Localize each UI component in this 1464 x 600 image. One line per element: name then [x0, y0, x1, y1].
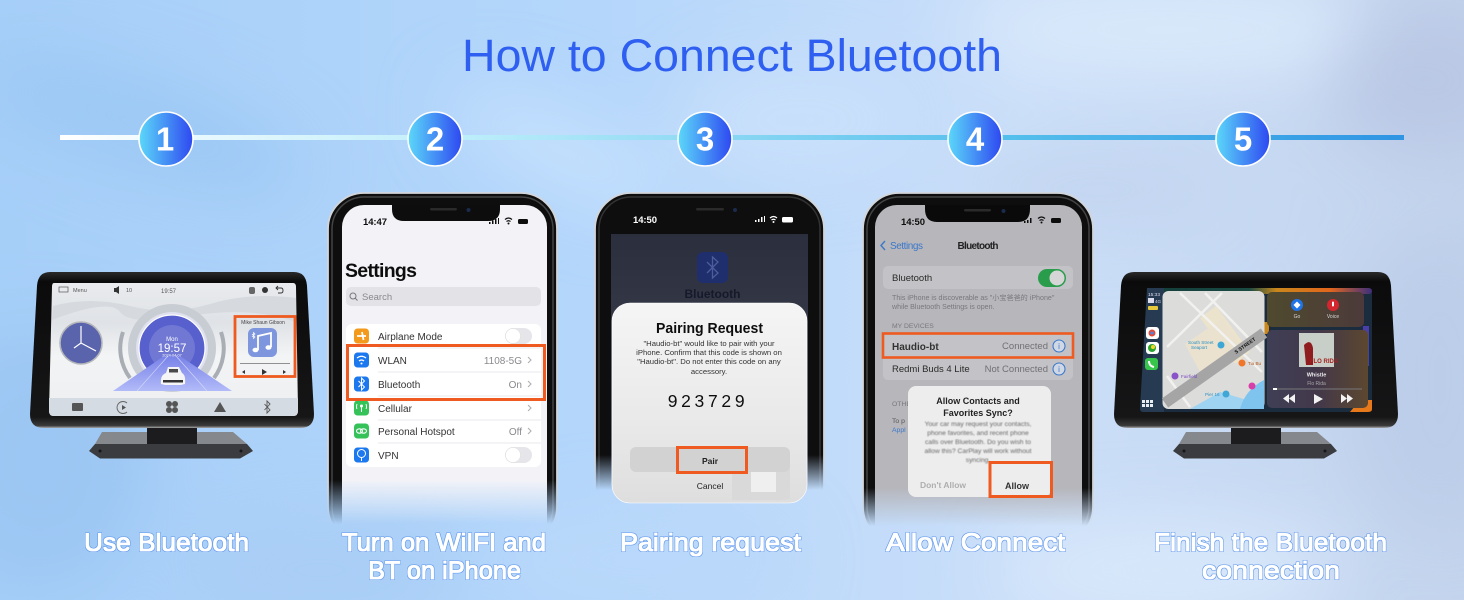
caption 1: Use Bluetooth [84, 529, 249, 557]
bluetooth settings content: while Bluetooth Settings is open. [891, 303, 995, 311]
allow sync dialog: Favorites Sync? [943, 408, 1013, 418]
device rows: Not Connected [985, 364, 1048, 375]
device rows: i [1058, 365, 1060, 374]
phone body [863, 193, 1093, 545]
settings list [346, 324, 541, 467]
bluetooth toggle row [883, 266, 1073, 289]
row: airplane mode [354, 328, 532, 344]
pairing dialog: Pairing Request [656, 321, 763, 337]
bluetooth settings content [881, 217, 1073, 434]
speedometer: Mon [166, 337, 178, 343]
timeline [60, 112, 1404, 166]
settings screen: 14:47 [363, 217, 387, 228]
step marker 1 [139, 112, 193, 166]
panel: step 1 car display [30, 272, 314, 458]
status bar [59, 286, 283, 295]
row: WLAN: 1108-5G [484, 356, 522, 367]
now playing panel: Flo Rida [1307, 381, 1326, 387]
panel: step 3 iPhone pairing request [594, 192, 825, 504]
step marker 2 [408, 112, 462, 166]
pairing dialog: iPhone. Confirm that this code is shown on [636, 348, 782, 357]
step marker 3 [678, 112, 732, 166]
map: Tia Bu [1248, 361, 1262, 366]
bluetooth settings content: MY DEVICES [892, 323, 934, 330]
device rows [883, 333, 1073, 380]
status bar: Menu [73, 288, 87, 294]
allow sync dialog: allow this? CarPlay will work without [924, 448, 1032, 455]
row: VPN: VPN [378, 451, 399, 462]
allow sync dialog: phone favorites, and recent phone [927, 430, 1029, 437]
now playing panel [1267, 330, 1368, 408]
display screen [49, 283, 298, 416]
panel: step 2 iPhone settings [328, 193, 557, 545]
caption 2: BT on iPhone [368, 557, 521, 585]
pairing dialog: Pair [702, 456, 719, 466]
bluetooth app icon: Bluetooth [684, 287, 740, 301]
bluetooth settings content: To p [892, 418, 905, 425]
search bar: Search [362, 292, 392, 303]
phone body [594, 192, 825, 489]
caption 3: Pairing request [620, 529, 801, 557]
display stand [89, 428, 253, 458]
row: Bluetooth: On [509, 380, 522, 391]
bluetooth settings content: 14:50 [901, 217, 925, 228]
settings screen [342, 205, 547, 545]
row: personal hotspot [354, 424, 531, 438]
sidebar: 4G [1155, 299, 1161, 304]
row: WLAN [354, 352, 531, 368]
music app: Mike Shaun Gibson [241, 320, 285, 326]
settings screen: Settings [345, 260, 417, 282]
step marker 5: 5 [1234, 120, 1252, 158]
allow sync dialog: Your car may request your contacts, [925, 421, 1032, 428]
caption 2 [342, 529, 546, 585]
step marker 1: 1 [156, 120, 174, 158]
orange highlight: Pair [678, 448, 746, 472]
step marker 3: 3 [696, 120, 714, 158]
pairing dialog: accessory. [691, 367, 727, 376]
search bar [346, 287, 541, 306]
sidebar: 15:33 [1148, 292, 1160, 298]
panel: step 4 iPhone bluetooth settings [863, 193, 1093, 545]
now playing panel: FLO RIDA [1310, 359, 1339, 365]
row: Bluetooth [354, 376, 531, 392]
map: Pier 16 [1205, 392, 1220, 397]
status bar: 10 [126, 288, 132, 294]
row: cellular [354, 400, 531, 416]
pairing dialog: "Haudio-bt". Do not enter this code on any [637, 357, 781, 366]
row: Bluetooth: Bluetooth [378, 380, 420, 391]
device rows: Connected [1002, 341, 1048, 352]
row: airplane mode: Airplane Mode [378, 332, 443, 343]
orange highlight: WLAN and Bluetooth rows [348, 346, 544, 400]
allow sync dialog: syncing. [966, 457, 990, 464]
map: S STREET [1234, 337, 1257, 356]
speedometer: 19:57 [158, 343, 186, 355]
status bar [633, 215, 793, 226]
speedometer: 2024-04-07 [162, 354, 182, 358]
allow sync dialog: Allow Contacts and [936, 396, 1020, 406]
row: VPN [354, 447, 532, 463]
pairing dialog: Cancel [697, 481, 723, 491]
speedometer [113, 304, 232, 392]
title: How to Connect Bluetooth [462, 30, 1002, 81]
row: personal hotspot: Off [509, 427, 522, 438]
map: Fairfield [1181, 374, 1198, 379]
bluetooth app icon [684, 252, 740, 301]
status icons [489, 218, 528, 224]
music app [240, 320, 290, 375]
allow sync dialog: Allow [1005, 481, 1030, 491]
phone frame [328, 193, 557, 543]
bluetooth settings content: Settings [890, 241, 923, 252]
step marker 2: 2 [426, 120, 444, 158]
pairing dialog: "Haudio-bt" would like to pair with your [643, 339, 775, 348]
status bar: 14:50 [633, 215, 657, 226]
display stand [1173, 428, 1337, 458]
now playing panel: Whistle [1307, 372, 1326, 378]
row: personal hotspot: Personal Hotspot [378, 427, 455, 438]
orange highlight [235, 316, 295, 376]
device rows: i [1058, 342, 1060, 351]
map: South Street [1188, 340, 1214, 345]
pairing dialog: 923729 [668, 391, 748, 411]
bluetooth settings content: Bluetooth [958, 241, 998, 252]
row: cellular: Cellular [378, 404, 413, 415]
colored wallpaper [1160, 288, 1372, 412]
orange highlight: Allow [990, 462, 1052, 496]
bluetooth settings content: OTHE [892, 401, 911, 408]
device rows: Haudio-bt [892, 342, 939, 353]
map: Seaport [1191, 345, 1208, 350]
allow sync dialog: calls over Bluetooth. Do you wish to [925, 439, 1031, 446]
car icon [161, 367, 185, 385]
clock [60, 322, 102, 364]
status bar: 19:57 [161, 289, 177, 295]
bluetooth settings content: This iPhone is discoverable as "小宝爸爸的 iPhone" [892, 293, 1055, 302]
allow sync dialog [908, 386, 1051, 497]
assistant panel [1267, 292, 1364, 327]
bluetooth settings content: Appl [892, 427, 906, 434]
panel: step 5 CarPlay display [1114, 272, 1398, 458]
bluetooth toggle row: Bluetooth [892, 273, 932, 284]
orange highlight: Haudio-bt row [883, 334, 1073, 358]
step marker 5 [1216, 112, 1270, 166]
step marker 4 [948, 112, 1002, 166]
caption 4: Allow Connect [886, 529, 1065, 557]
caption 5: connection [1202, 557, 1340, 585]
pairing dialog [612, 303, 807, 503]
allow sync dialog: Don't Allow [920, 480, 966, 490]
row: WLAN: WLAN [378, 356, 407, 367]
map [1162, 291, 1264, 409]
device rows: Redmi Buds 4 Lite [892, 364, 970, 375]
assistant panel: Voice [1327, 314, 1339, 320]
caption 5: Finish the Bluetooth [1154, 529, 1387, 557]
caption 2: Turn on WiIFI and [342, 529, 546, 557]
bottom dock icons [72, 401, 270, 414]
assistant panel: Go [1294, 314, 1301, 320]
step marker 4: 4 [966, 120, 985, 158]
caption 5 [1154, 529, 1387, 585]
sidebar [1140, 288, 1164, 412]
